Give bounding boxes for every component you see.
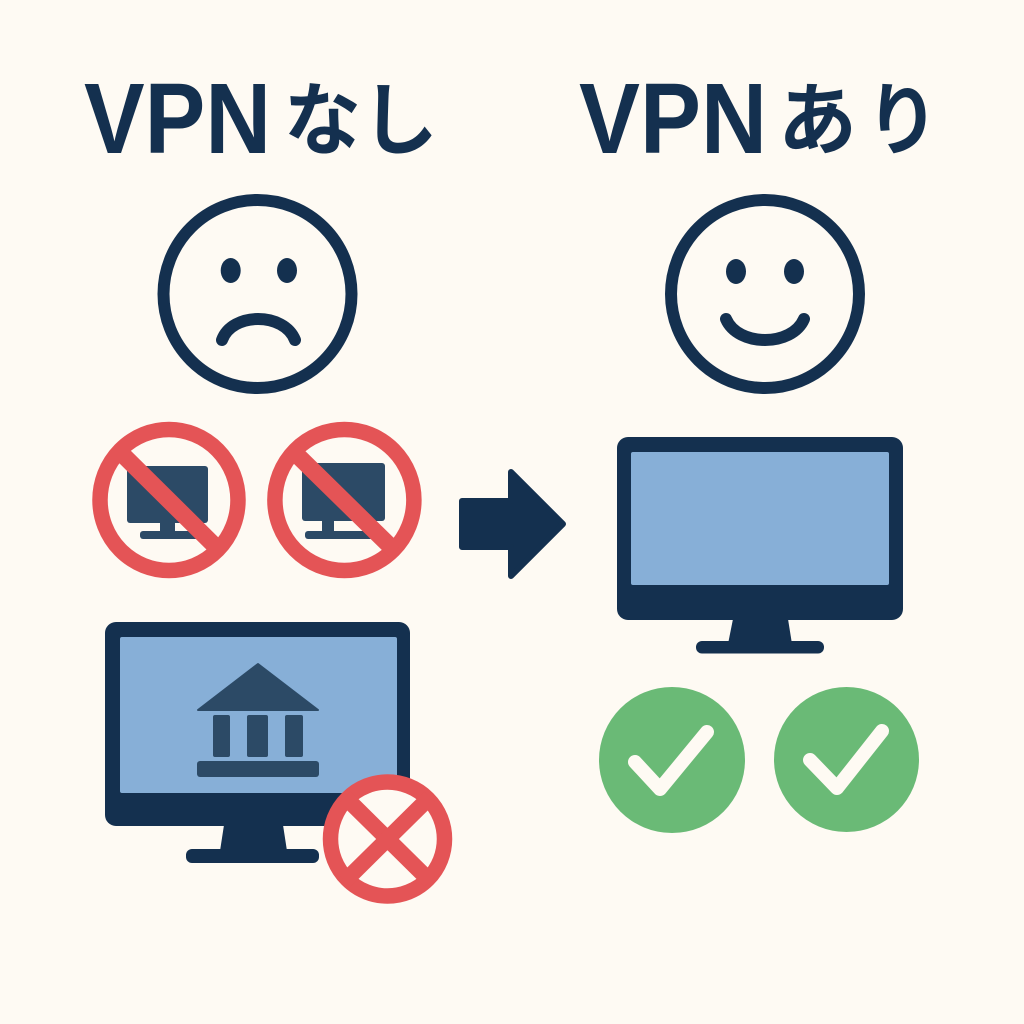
icon: bank monitor — [105, 622, 410, 863]
icon: blocked monitor 2 — [275, 430, 414, 570]
icon: sad face — [164, 200, 352, 388]
icon: happy face — [671, 200, 859, 388]
icon: blocked monitor 1 — [100, 430, 238, 570]
icon: red error badge — [330, 782, 444, 896]
icon: check badge 2 — [774, 687, 919, 832]
icon: bank building — [197, 664, 319, 777]
title: VPNなし — [84, 56, 438, 175]
title: VPNあり — [579, 56, 939, 175]
icon: large monitor with VPN — [617, 437, 903, 654]
arrow: without VPN to with VPN — [462, 472, 563, 576]
icon: check badge 1 — [599, 687, 745, 833]
title: VPNあり: あ — [778, 56, 857, 171]
title: VPNあり: り — [866, 56, 939, 171]
title: VPNなし: VPN — [84, 63, 271, 175]
title: VPNあり: VPN — [579, 63, 767, 175]
title: VPNなし: なし — [284, 56, 438, 171]
